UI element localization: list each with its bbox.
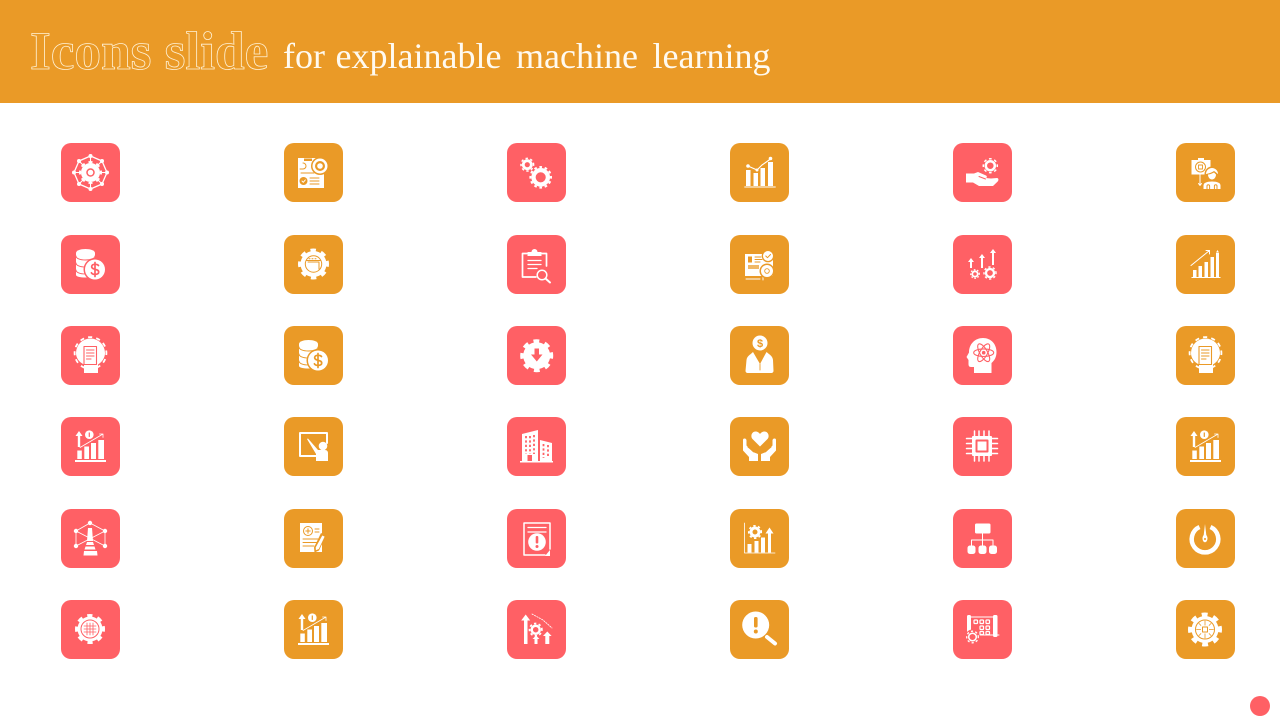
icon: clipboard with magnifier [507, 235, 566, 294]
icon: revenue chart [284, 600, 343, 659]
icon: head with atom [953, 326, 1012, 385]
icon: document head in gear [1176, 326, 1235, 385]
page marker dot [1250, 696, 1270, 716]
icon: gauge [1176, 509, 1235, 568]
icon: database coins [284, 326, 343, 385]
icon: office buildings [507, 417, 566, 476]
title: learning [652, 36, 770, 76]
icon: revenue chart [61, 417, 120, 476]
icon: gear with chip [1176, 600, 1235, 659]
icon: gear with down arrow [507, 326, 566, 385]
icon: gear growth arrows [507, 600, 566, 659]
icon: growth bars with arrow [1176, 235, 1235, 294]
title: machine [516, 36, 638, 76]
icon: businessman with dollar [730, 326, 789, 385]
header band [0, 0, 1280, 103]
icon: hierarchy chart [953, 509, 1012, 568]
title: explainable [336, 36, 501, 76]
icon: chess piece network [61, 509, 120, 568]
title [30, 21, 770, 81]
icon: blueprint with gear [953, 600, 1012, 659]
icon: gear with window [284, 235, 343, 294]
title: Icons slide [30, 21, 268, 81]
icon: form with pencil [284, 509, 343, 568]
icon: microchip [953, 417, 1012, 476]
icon: businessman with dollar: $ [757, 338, 763, 350]
icon: report with target [284, 143, 343, 202]
icon: hand holding gear [953, 143, 1012, 202]
icon: two gears [507, 143, 566, 202]
icon: alert magnifier [730, 600, 789, 659]
icon: revenue chart [1176, 417, 1235, 476]
icon: alert document [507, 509, 566, 568]
icon: teacher at board [284, 417, 343, 476]
icon: network gear [61, 143, 120, 202]
icon: presenter with board [1176, 143, 1235, 202]
title: for [283, 36, 325, 76]
icon: database coins [61, 235, 120, 294]
icon: gears with rising arrows [953, 235, 1012, 294]
icon: gear with circuit [61, 600, 120, 659]
icon: hands holding heart [730, 417, 789, 476]
icon: bar chart with trend [730, 143, 789, 202]
icon: gear chart with arrow [730, 509, 789, 568]
icon: certificate with badges [730, 235, 789, 294]
icon: document head in gear [61, 326, 120, 385]
